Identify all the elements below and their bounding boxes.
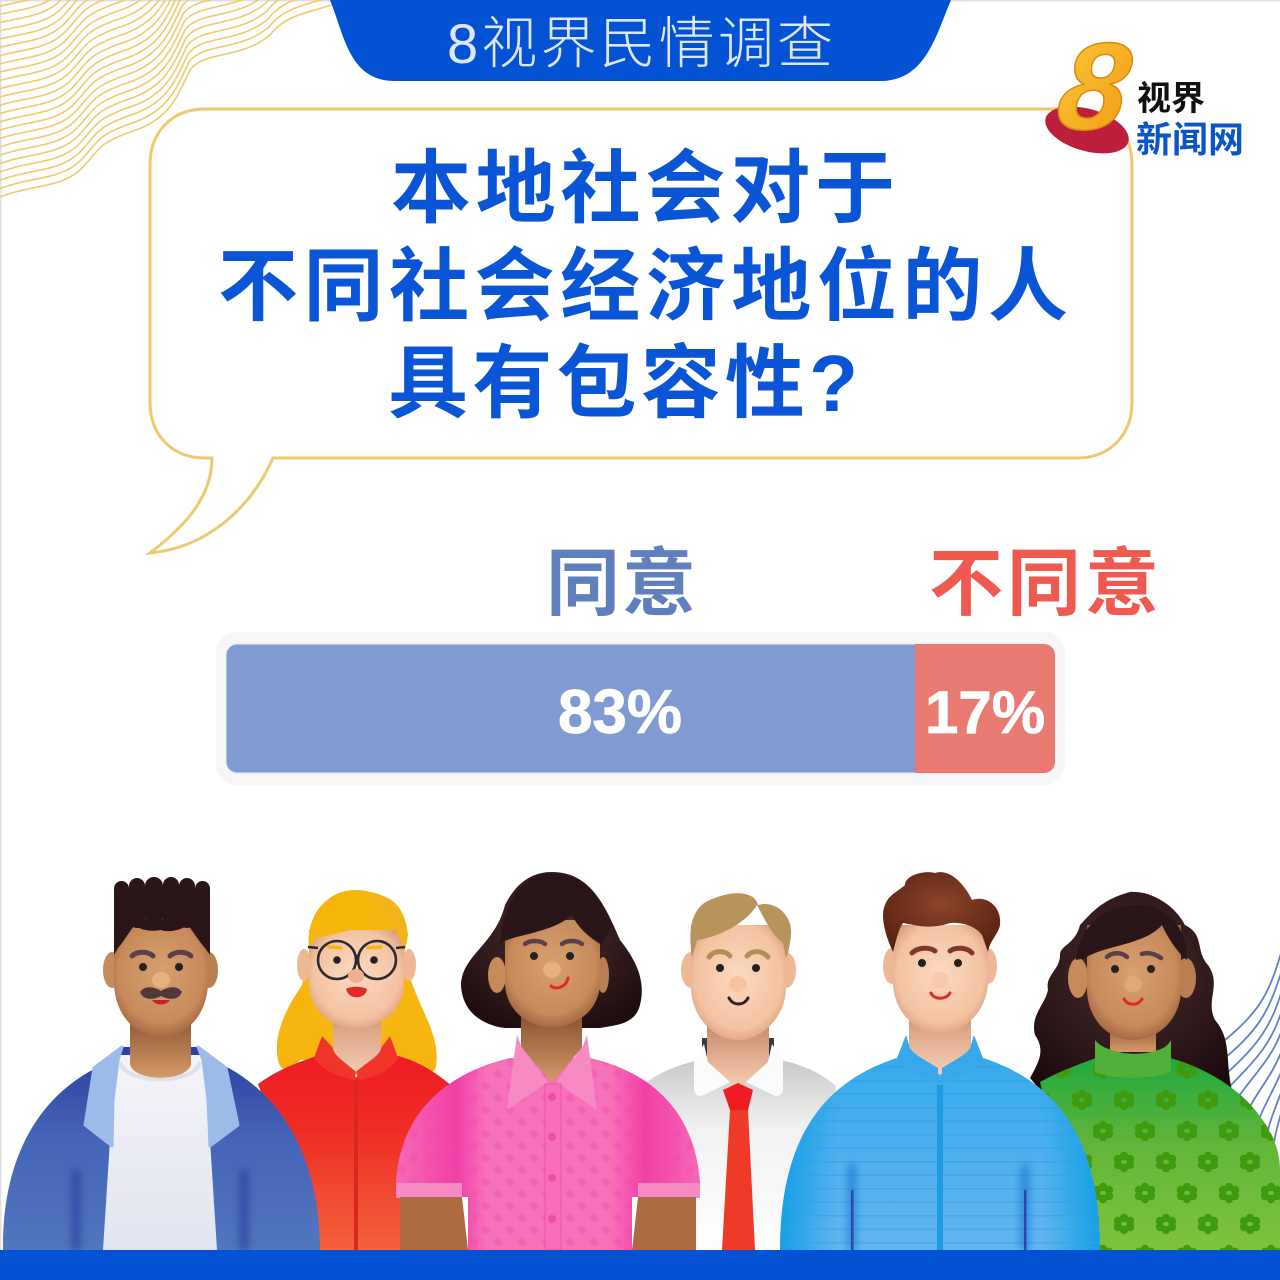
legend: agree: 同意 bbox=[546, 542, 696, 625]
header tab bbox=[330, 0, 951, 81]
main question: 本地社会对于 bbox=[391, 144, 895, 233]
pink shirt bbox=[396, 1058, 700, 1250]
main question: 具有包容性? bbox=[388, 339, 858, 428]
speech bubble bbox=[150, 109, 1132, 553]
main question: 不同社会经济地位的人 bbox=[218, 242, 1068, 331]
arms bbox=[400, 1197, 468, 1250]
person: woman with bob haircut in pink shirt bbox=[396, 872, 700, 1250]
neck bbox=[521, 1015, 582, 1082]
logo wordmark: 视界 bbox=[1137, 80, 1205, 118]
person: man in white shirt and red tie bbox=[644, 893, 836, 1250]
zipper bbox=[937, 1085, 943, 1250]
lapels bbox=[85, 1047, 122, 1146]
placket and buttons bbox=[545, 1084, 561, 1250]
logo: 8视界新闻网: 新闻网 bbox=[1136, 119, 1244, 160]
mustache and mouth bbox=[152, 1000, 170, 1004]
flat-top hair bbox=[114, 877, 210, 955]
person: blonde woman with glasses bbox=[258, 890, 452, 1250]
white t-shirt bbox=[103, 1055, 217, 1250]
cuffs bbox=[396, 1183, 462, 1198]
red tie bbox=[722, 1083, 755, 1250]
legend: disagree: 不同意 bbox=[929, 542, 1159, 625]
glasses bbox=[308, 941, 405, 979]
agree value: 83% bbox=[558, 678, 682, 747]
logo numeral: 8 bbox=[1050, 18, 1139, 156]
person: woman with long wavy hair in green sweater bbox=[1030, 892, 1280, 1250]
header title: 8视界民情调查 bbox=[447, 12, 833, 75]
person: man with mustache in blue jacket bbox=[3, 877, 320, 1250]
quiff hair bbox=[883, 872, 1000, 952]
stacked bar chart bbox=[216, 632, 1065, 785]
disagree value: 17% bbox=[925, 679, 1045, 746]
person: man with brown hair in light blue jacket bbox=[780, 872, 1100, 1250]
logo: 8视界新闻网 bbox=[1040, 18, 1244, 162]
sleeve creases bbox=[848, 1165, 856, 1250]
bottom band bbox=[0, 1250, 1280, 1280]
main question bbox=[218, 144, 1068, 428]
collar bbox=[507, 1035, 548, 1110]
